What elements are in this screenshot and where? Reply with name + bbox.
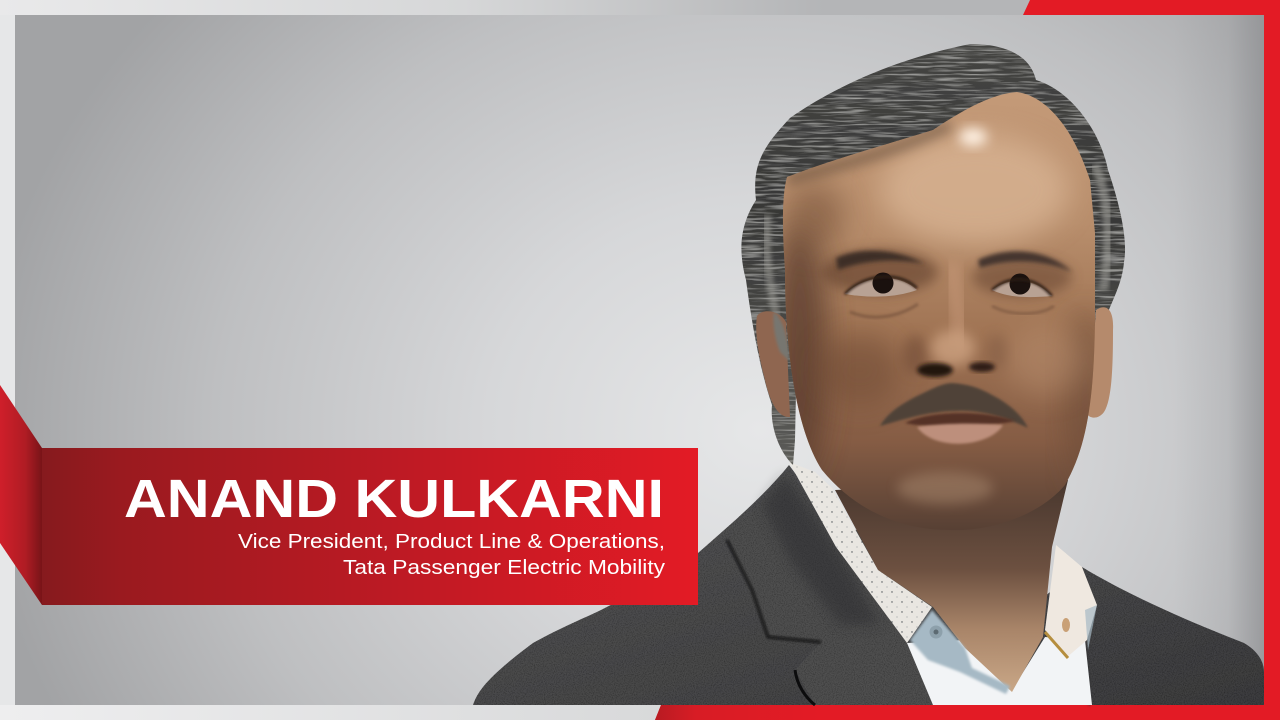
hair	[741, 44, 1125, 465]
shirt collar	[789, 462, 1097, 658]
job title: Vice President, Product Line & Operations,	[238, 531, 665, 553]
name banner	[42, 448, 698, 605]
ears	[756, 307, 1113, 418]
jacket	[473, 465, 1264, 705]
neck and open shirt	[835, 480, 1092, 705]
name heading: ANAND KULKARNI	[124, 469, 664, 529]
mouth	[905, 413, 1015, 444]
nose	[903, 330, 1007, 377]
ribbon fold on the left	[0, 385, 42, 605]
eyes	[845, 272, 1054, 317]
moustache	[880, 383, 1028, 428]
face	[772, 92, 1105, 530]
red frame accents: top, right and bottom	[655, 0, 1280, 720]
eyebrows	[836, 251, 1072, 272]
company name: Tata Passenger Electric Mobility	[343, 557, 665, 579]
portrait photo illustration	[473, 44, 1264, 705]
